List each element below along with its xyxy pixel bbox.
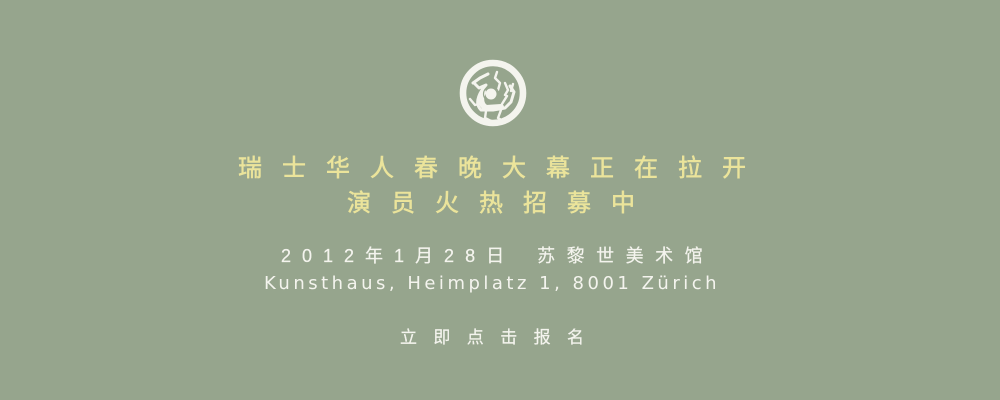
logo: dragon roundel bbox=[460, 60, 526, 126]
heading line 2: 演员火热招募中 bbox=[347, 190, 655, 217]
call to action: 立即点击报名 bbox=[400, 328, 600, 347]
heading line 1: 瑞士华人春晚大幕正在拉开 bbox=[238, 155, 766, 182]
date and venue: 2012年1月28日 苏黎世美术馆 bbox=[281, 246, 714, 266]
address: Kunsthaus, Heimplatz 1, 8001 Zürich bbox=[264, 273, 720, 294]
